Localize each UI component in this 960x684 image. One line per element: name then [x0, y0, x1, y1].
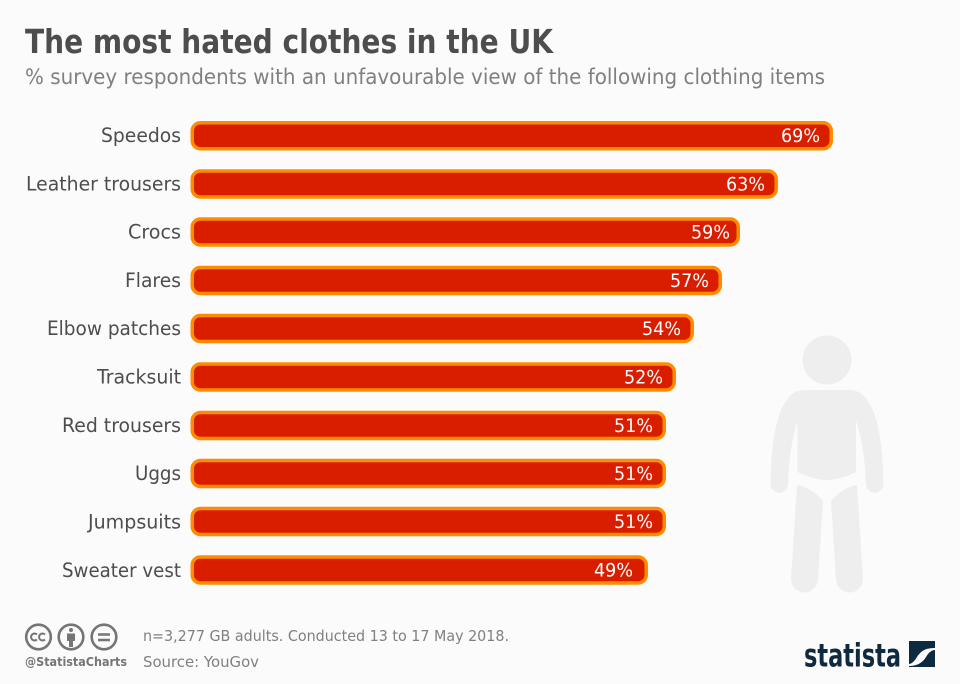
row: Flares: [125, 268, 720, 294]
sample note: n=3,277 GB adults. Conducted 13 to 17 May 2018.: [143, 627, 509, 645]
row: Flares: Flares: [125, 269, 181, 292]
row: Leather trousers: Leather trousers: [26, 172, 181, 196]
statista logo: statista: [804, 636, 901, 674]
icon: person in underpants: [770, 336, 884, 592]
row: Tracksuit: Tracksuit: [96, 366, 181, 388]
row: Elbow patches: [47, 316, 692, 342]
row: Sweater vest: 49%: [594, 560, 633, 582]
row: Elbow patches: 54%: [642, 318, 681, 340]
handle: @StatistaCharts: [25, 654, 127, 669]
row: Speedos: 69%: [781, 125, 820, 147]
row: Tracksuit: 52%: [624, 366, 663, 388]
row: Elbow patches: Elbow patches: [47, 317, 181, 340]
row: Red trousers: Red trousers: [62, 414, 181, 437]
row: Speedos: [101, 123, 831, 149]
row: Sweater vest: Sweater vest: [62, 559, 181, 582]
row: Uggs: 51%: [614, 463, 653, 485]
row: Crocs: 59%: [691, 222, 730, 244]
row: Flares: 57%: [670, 270, 709, 292]
row: Leather trousers: [26, 171, 776, 197]
bar chart: [26, 123, 831, 583]
row: Speedos: Speedos: [101, 124, 181, 147]
subtitle: % survey respondents with an unfavourable view of the following clothing items: [25, 65, 825, 90]
row: Jumpsuits: [86, 508, 664, 534]
source: Source: YouGov: [143, 653, 259, 671]
row: Tracksuit: [96, 364, 674, 390]
row: Uggs: [135, 460, 664, 486]
row: Jumpsuits: Jumpsuits: [86, 510, 181, 534]
row: Sweater vest: [62, 557, 646, 583]
row: Uggs: Uggs: [135, 462, 181, 485]
row: Crocs: Crocs: [128, 220, 181, 244]
row: Leather trousers: 63%: [726, 174, 765, 196]
row: Red trousers: 51%: [614, 415, 653, 437]
title: The most hated clothes in the UK: [25, 23, 555, 61]
row: Red trousers: [62, 412, 664, 438]
icon: creative commons licence: [26, 625, 116, 649]
row: Crocs: [128, 219, 738, 245]
row: Jumpsuits: 51%: [614, 511, 653, 533]
